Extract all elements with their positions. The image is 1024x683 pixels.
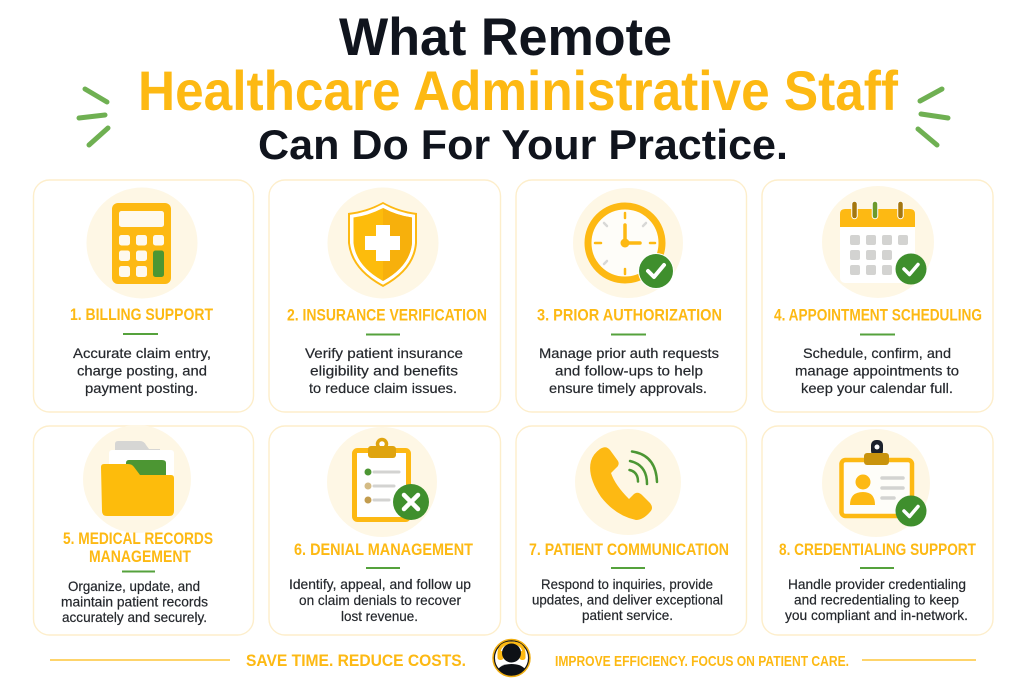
description: and follow-ups to help — [555, 362, 703, 378]
heading: MANAGEMENT — [89, 547, 192, 566]
description: accurately and securely. — [62, 609, 207, 625]
icon: folder — [101, 441, 174, 516]
panel: insurance verification — [269, 180, 500, 412]
title: What Remote — [339, 8, 672, 67]
icon: calculator — [112, 203, 171, 284]
description: maintain patient records — [61, 594, 208, 610]
description: manage appointments to — [795, 362, 959, 378]
footer text right: IMPROVE EFFICIENCY. FOCUS ON PATIENT CARE. — [555, 653, 849, 670]
panel: patient communication — [516, 426, 746, 635]
icon: support agent — [493, 640, 530, 676]
icon: phone — [590, 447, 657, 520]
description — [532, 576, 723, 623]
footer text left: SAVE TIME. REDUCE COSTS. — [246, 651, 466, 670]
title: Can Do For Your Practice. — [258, 121, 788, 168]
title: Healthcare Administrative Staff — [138, 59, 898, 122]
description — [539, 345, 719, 396]
icon: id badge — [842, 440, 926, 526]
description: Accurate claim entry, — [73, 345, 211, 361]
icon: clipboard with x — [354, 440, 429, 520]
heading: 2. INSURANCE VERIFICATION — [287, 306, 487, 324]
icon: shield — [348, 202, 417, 287]
description: payment posting. — [85, 380, 198, 396]
panel: prior authorization — [516, 180, 746, 412]
heading — [63, 529, 213, 566]
icon: clock — [588, 206, 674, 289]
heading: 6. DENIAL MANAGEMENT — [294, 540, 474, 559]
description: you compliant and in-network. — [785, 607, 968, 623]
description: Respond to inquiries, provide — [541, 576, 713, 592]
description: Handle provider credentialing — [788, 576, 966, 592]
description — [785, 576, 968, 623]
description — [305, 345, 463, 396]
icon: left green burst — [79, 89, 108, 145]
icon: calendar — [840, 204, 926, 284]
description: lost revenue. — [341, 608, 418, 624]
description — [289, 576, 471, 624]
heading: 5. MEDICAL RECORDS — [63, 529, 213, 548]
description: Identify, appeal, and follow up — [289, 576, 471, 592]
description: Verify patient insurance — [305, 345, 463, 361]
panel: medical records management — [34, 425, 254, 635]
description — [795, 345, 959, 396]
description: eligibility and benefits — [310, 362, 458, 378]
footer banner — [50, 640, 976, 676]
panel: appointment scheduling — [762, 180, 993, 412]
description: keep your calendar full. — [801, 380, 953, 396]
description: and recredentialing to keep — [794, 592, 959, 608]
description: updates, and deliver exceptional — [532, 592, 723, 608]
panel: denial management — [269, 426, 500, 635]
heading: 3. PRIOR AUTHORIZATION — [537, 306, 722, 324]
description: Manage prior auth requests — [539, 345, 719, 361]
heading: 8. CREDENTIALING SUPPORT — [779, 540, 976, 559]
panel: credentialing support — [762, 426, 993, 635]
description: charge posting, and — [77, 362, 207, 378]
icon: right green burst — [918, 89, 948, 145]
heading: 1. BILLING SUPPORT — [70, 305, 214, 324]
description: patient service. — [582, 607, 673, 623]
description — [61, 578, 208, 625]
title — [138, 8, 898, 168]
description: ensure timely approvals. — [549, 380, 707, 396]
description — [73, 345, 211, 396]
heading: 7. PATIENT COMMUNICATION — [529, 540, 729, 559]
panel: billing support — [34, 180, 254, 412]
description: to reduce claim issues. — [309, 380, 457, 396]
description: Schedule, confirm, and — [803, 345, 951, 361]
description: on claim denials to recover — [299, 592, 461, 608]
description: Organize, update, and — [68, 578, 200, 594]
